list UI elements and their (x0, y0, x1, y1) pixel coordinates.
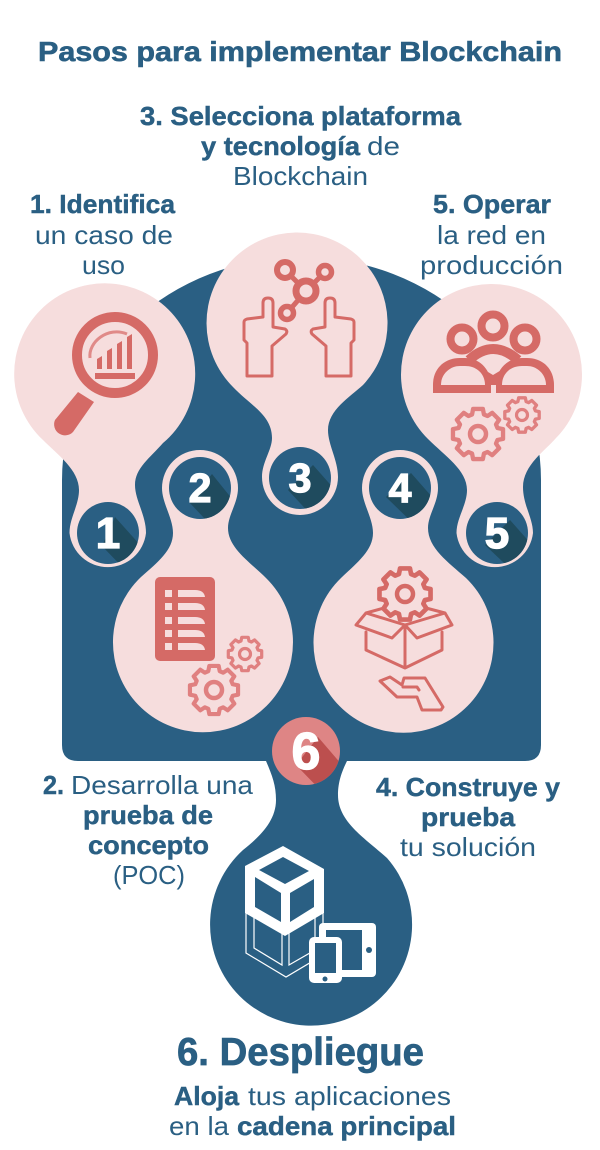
text: step 6 description: tus aplicaciones (248, 1081, 451, 1111)
panel: step 5 bulb: 5 (485, 509, 509, 558)
badge: step 6: 6 (292, 723, 320, 781)
heading: step 3: de (367, 131, 400, 161)
text: step 6 description: Aloja (174, 1081, 240, 1111)
panel: step 3 bulb (207, 233, 388, 530)
panel: step 2 bulb (113, 450, 293, 732)
panel: step 4 bulb (314, 450, 494, 733)
heading: step 3 (140, 101, 462, 191)
panel: step 5 bulb (401, 284, 582, 580)
icon: hands and network nodes (244, 262, 354, 376)
icon: gears step 5 (453, 398, 539, 459)
text: step 2 description: prueba de (83, 800, 213, 830)
text: step 6 description (169, 1081, 456, 1141)
heading: step 6: 6. Despliegue (177, 1031, 424, 1074)
heading: step 5 (420, 189, 563, 280)
panel: step 4 bulb: 4 (389, 465, 412, 511)
text: step 2 description: (POC) (113, 860, 185, 890)
icon: document list (155, 577, 215, 661)
heading: step 5: 5. Operar (433, 189, 551, 219)
text: step 4 description: 4. Construye y (376, 772, 561, 802)
blue background shape with funnel (62, 257, 541, 1026)
heading: step 1: 1. Identifica (30, 189, 176, 219)
text: step 2 description: concepto (88, 830, 209, 860)
icon: open box, gear and hand (356, 568, 452, 710)
heading: step 5: la red en (437, 220, 546, 250)
text: step 6 description: cadena principal (237, 1111, 456, 1141)
text: step 6 description: en la (169, 1111, 230, 1141)
panel: step 1 bulb (14, 283, 195, 575)
heading: step 5: producción (420, 250, 563, 280)
text: step 2 description (43, 770, 254, 890)
text: step 2 description: 2. (43, 770, 64, 800)
text: step 4 description: tu solución (400, 832, 536, 862)
panel: step 1 bulb: 1 (96, 509, 120, 558)
icon: blockchain cube with devices (245, 846, 376, 983)
icon: team of three people (433, 314, 554, 393)
icon: magnifier with bar chart (54, 317, 153, 435)
title: Pasos para implementar Blockchain (38, 36, 562, 67)
text: step 2 description: Desarrolla una (71, 770, 254, 800)
heading: step 3: Blockchain (233, 161, 368, 191)
badge: step 6 (272, 717, 340, 785)
text: step 4 description: prueba (421, 802, 516, 832)
text: step 4 description (376, 772, 561, 862)
panel: step 2 bulb: 2 (189, 465, 211, 511)
heading: step 1: uso (82, 250, 125, 280)
heading: step 3: y tecnología (201, 131, 361, 161)
heading: step 3: 3. Selecciona plataforma (140, 101, 462, 131)
heading: step 1 (30, 189, 176, 280)
heading: step 1: un caso de (35, 220, 173, 250)
panel: step 3 bulb: 3 (289, 455, 311, 501)
icon: gears step 2 (190, 637, 262, 714)
